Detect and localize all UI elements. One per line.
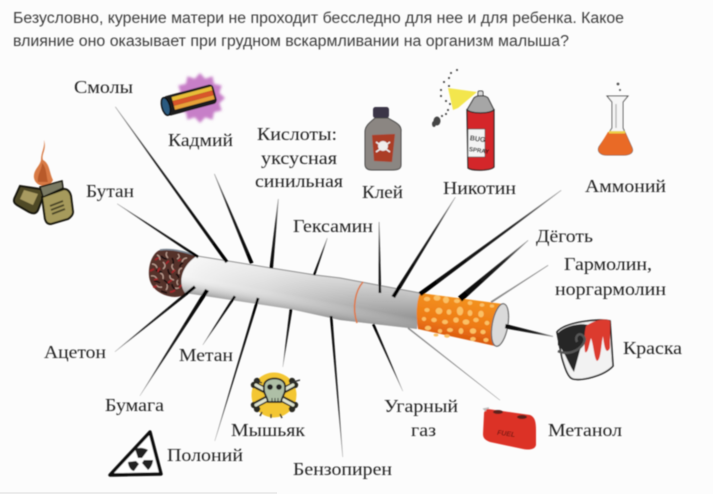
line: Клей [379, 222, 381, 293]
line: Полоний [215, 298, 259, 441]
paper body [181, 256, 420, 329]
lighter left case [14, 186, 44, 213]
line: Гармолин [491, 265, 548, 303]
label: Кислоты: синильная [255, 171, 343, 191]
line: Гексамин [313, 238, 328, 276]
line: Мышьяк [283, 309, 292, 367]
line: Бумага [140, 289, 209, 396]
label: Бензопирен: Бензопирен [293, 459, 392, 479]
label: Краска: Краска [623, 338, 682, 358]
label: Угарный газ: газ [411, 420, 436, 440]
lighter lid [40, 181, 63, 197]
can label: SPRAY [469, 147, 489, 156]
label: Полоний: Полоний [167, 445, 243, 465]
flame [34, 140, 53, 186]
icon: flask [598, 83, 632, 155]
heading text: Безусловно, курение матери не проходит бесследно для нее и для ребенка. Какое [13, 10, 624, 27]
label: Метанол: Метанол [548, 420, 622, 440]
cigarette [149, 249, 511, 348]
line: Дёготь [458, 240, 528, 302]
line: Метанол [408, 327, 500, 400]
line: Ацетон [115, 286, 196, 352]
orange ring [355, 282, 363, 323]
fly [432, 116, 440, 127]
label: Гармолин, норгармолин [555, 254, 666, 299]
lighter right case [42, 189, 73, 224]
label: Гармолин, норгармолин: норгармолин [555, 279, 666, 299]
pointer lines [115, 107, 561, 457]
icon: lighter [14, 140, 73, 224]
icon: spray can [432, 69, 494, 170]
label: Бутан: Бутан [86, 181, 134, 201]
label: Дёготь: Дёготь [536, 226, 593, 246]
diagram: cigarette with chemicals [14, 69, 682, 479]
line: Кислоты [270, 199, 279, 268]
label: Гармолин, норгармолин: Гармолин, [564, 254, 652, 274]
line: Бензопирен [330, 316, 343, 457]
label: Метан: Метан [179, 345, 233, 365]
line: Кадмий [214, 174, 254, 264]
line: Смолы [115, 107, 228, 263]
can label: BUG [469, 135, 486, 144]
line: Никотин [392, 197, 456, 298]
spray [448, 88, 477, 110]
label: Клей: Клей [362, 182, 403, 202]
label: Аммоний: Аммоний [585, 176, 666, 196]
icon: fuel can [483, 408, 536, 450]
filter [417, 293, 503, 346]
icon: glue bottle [365, 107, 401, 170]
icon: radiation sign [110, 432, 161, 475]
icon: cadmium battery [159, 73, 225, 123]
filter end [489, 302, 511, 348]
line: Бутан [117, 204, 199, 258]
icon: paint can [557, 320, 613, 379]
label: Мышьяк: Мышьяк [231, 420, 305, 440]
label: Никотин: Никотин [443, 178, 516, 198]
label: Угарный газ: Угарный [384, 396, 458, 416]
label: Кислоты: Кислоты: [257, 124, 337, 144]
heading text: влияние оно оказывает при грудном вскармливании на организм малыша? [13, 33, 569, 50]
icon: skull and crossbones [251, 372, 300, 418]
labels [44, 77, 682, 479]
line: Аммоний [418, 190, 561, 296]
icon: fuel can: FUEL [497, 430, 516, 439]
line: Краска [505, 324, 553, 337]
label: Угарный газ [384, 396, 458, 440]
can [478, 91, 483, 100]
label: Кислоты [255, 124, 343, 191]
label: Смолы: Смолы [74, 77, 133, 97]
label: Бумага: Бумага [105, 395, 164, 415]
label: Кадмий: Кадмий [168, 130, 233, 150]
label: Ацетон: Ацетон [44, 342, 106, 362]
line: Угарный газ [372, 324, 403, 391]
spray droplets [440, 69, 458, 117]
can label [468, 129, 489, 157]
label: Гексамин: Гексамин [293, 216, 373, 236]
heading text [13, 10, 624, 50]
line: Метан [203, 296, 236, 345]
tobacco end [149, 249, 197, 297]
label: Кислоты: уксусная [261, 148, 337, 168]
